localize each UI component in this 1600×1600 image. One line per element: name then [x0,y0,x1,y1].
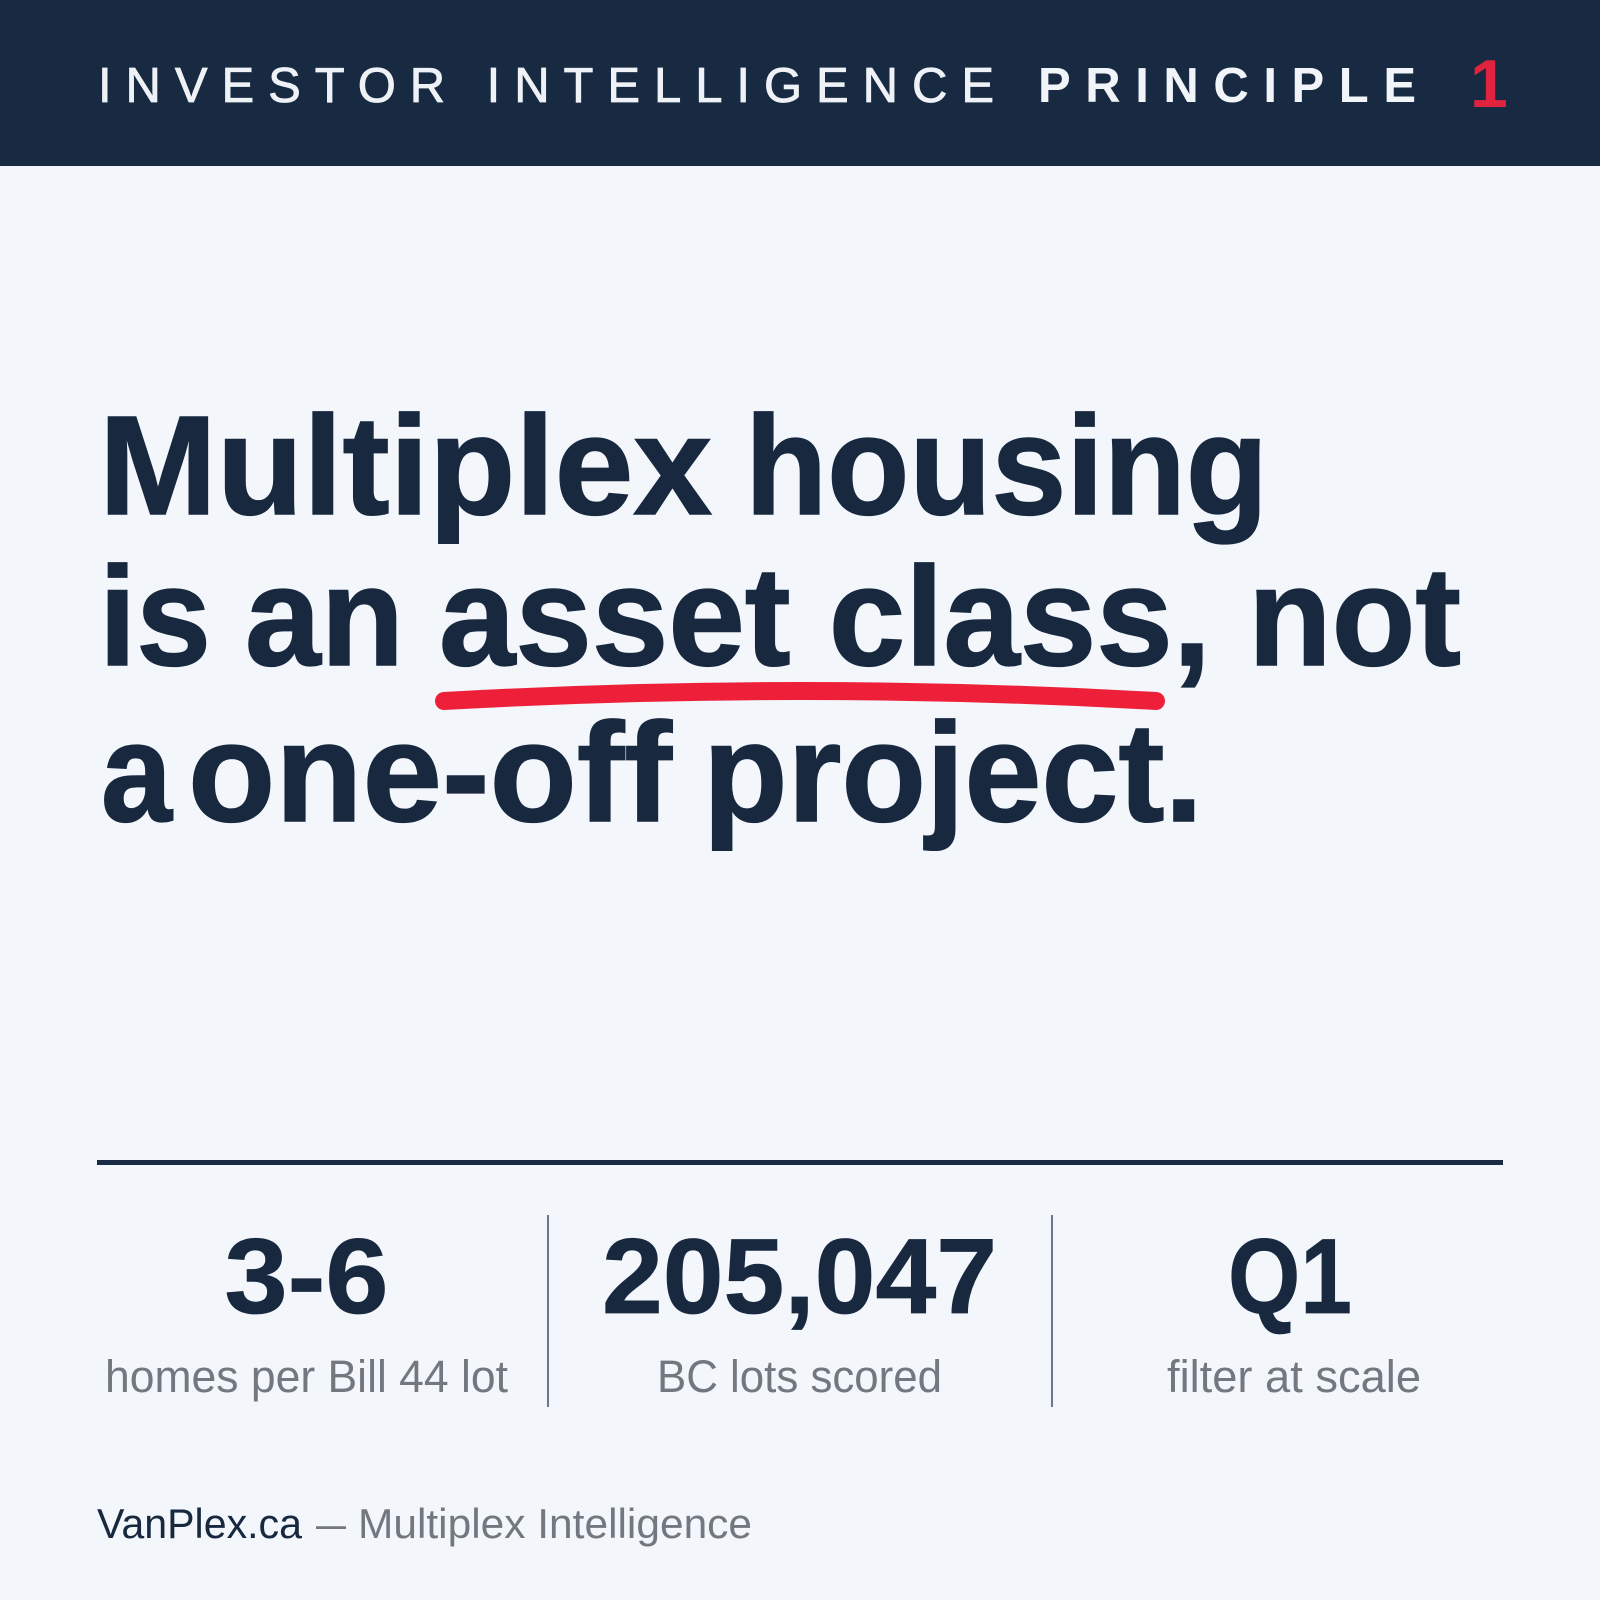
headline [99,386,1461,851]
header band [0,0,1600,166]
headline: Multiplex [99,386,712,544]
stat: filter [1167,1216,1421,1402]
stats rule [97,1160,1503,1165]
headline: an [245,537,404,695]
header label: principle: PRINCIPLE [1038,59,1416,113]
headline: project. [703,693,1203,851]
footer: — [316,1500,346,1547]
headline: is [99,537,211,695]
headline: a [101,693,173,851]
headline: asset class, [439,537,1211,695]
headline: one-off [188,693,673,851]
footer: Multiplex Intelligence [358,1500,752,1547]
stat: lots scored [602,1216,997,1402]
stat: filter: Q1 [1228,1216,1352,1336]
stat divider right [1051,1215,1053,1407]
stat: homes per lot: homes per Bill 44 lot [105,1351,508,1402]
footer [97,1500,752,1547]
stat: filter: filter at scale [1167,1351,1421,1402]
headline: not [1248,537,1461,695]
stat: lots scored: BC lots scored [657,1351,942,1402]
principle number: 1 [1470,46,1508,122]
red underline under asset class [444,691,1156,701]
stat: lots scored: 205,047 [602,1216,997,1336]
stat divider left [547,1215,549,1407]
headline: housing [745,386,1268,544]
header label: investor intelligence: INVESTOR INTELLIGENCE [98,59,994,113]
stat: homes per lot [105,1216,508,1402]
footer: VanPlex.ca [97,1500,303,1547]
stat: homes per lot: 3-6 [224,1216,388,1336]
